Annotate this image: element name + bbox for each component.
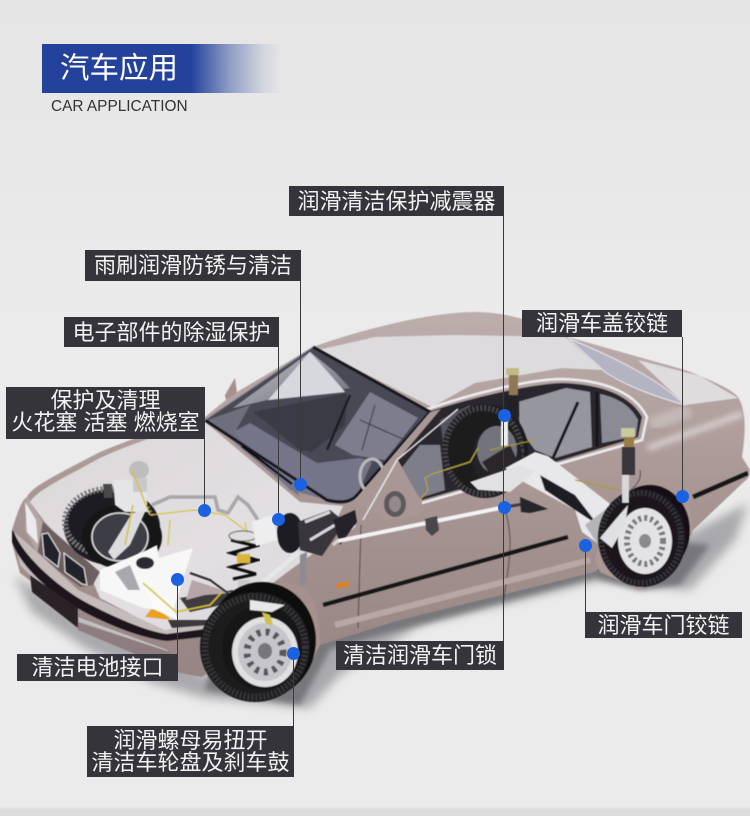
brake lines	[150, 497, 258, 550]
label: spark plug, piston, combustion chamber: 保护及清理	[50, 388, 160, 413]
lower bumper	[78, 622, 180, 673]
bumper strip	[12, 530, 212, 641]
sill highlight	[335, 560, 590, 625]
label: wheel nut and brake drum: 清洁车轮盘及刹车鼓	[91, 750, 290, 775]
leader line: wheel nut	[293, 653, 294, 726]
leader line: battery	[177, 579, 178, 654]
bumper top	[12, 530, 212, 641]
leader line: spark plug	[204, 439, 205, 510]
marker dot: door lock	[498, 501, 511, 514]
label: electronics: 电子部件的除湿保护	[72, 320, 270, 345]
label: battery: 清洁电池接口	[31, 655, 164, 680]
side windows	[397, 383, 642, 500]
side trim	[323, 537, 568, 605]
marker dot: wheel nut	[287, 647, 300, 660]
coil spring	[229, 531, 257, 615]
trunk highlight	[638, 360, 738, 405]
side body highlight	[648, 414, 742, 448]
nose panel around grille	[38, 522, 100, 587]
leader line: bonnet hinge	[682, 337, 683, 497]
roof panel	[318, 335, 602, 407]
wiper	[242, 446, 292, 484]
window belts	[553, 392, 597, 458]
hood panel	[30, 422, 343, 632]
label: shock absorber: 润滑清洁保护减震器	[297, 189, 496, 214]
label: wheel nut and brake drum: 润滑螺母易扭开	[113, 728, 268, 753]
title banner	[42, 44, 282, 93]
window frame	[397, 379, 647, 503]
marker dot: bonnet hinge	[676, 490, 689, 503]
A pillar and mirror	[355, 409, 458, 520]
rear right shock absorber	[621, 428, 635, 503]
leader line: door hinge	[585, 545, 586, 612]
seat belt and pillar	[327, 395, 350, 450]
ground shadow	[14, 503, 748, 708]
leader line: shock absorber and door lock	[503, 216, 504, 641]
marker dot: door hinge	[579, 539, 592, 552]
rear window	[568, 338, 685, 405]
marker dot: wiper	[294, 478, 307, 491]
door panel	[253, 393, 347, 452]
steering wheel	[360, 459, 384, 493]
front suspension	[100, 461, 235, 628]
steering rod	[338, 503, 530, 541]
leader line: electronics	[278, 347, 279, 520]
upper glass reflection	[233, 352, 350, 408]
label: bonnet hinge: 润滑车盖铰链	[536, 311, 668, 336]
fender lip	[205, 583, 320, 675]
label: wiper: 雨刷润滑防锈与清洁	[94, 253, 292, 278]
label: door hinge: 润滑车门铰链	[597, 613, 730, 638]
rear fender lip	[595, 487, 692, 590]
label: wheel nut and brake drum	[87, 726, 294, 777]
seat back	[335, 392, 418, 460]
mirror stalk	[225, 378, 237, 400]
rear shock absorber	[501, 368, 519, 446]
front corner	[25, 497, 42, 552]
windshield	[205, 347, 430, 502]
title banner: 汽车应用	[60, 52, 178, 85]
leader line: wiper	[300, 281, 301, 484]
front left wheel	[64, 489, 162, 569]
marker dot: electronics	[272, 513, 285, 526]
subtitle: CAR APPLICATION	[51, 98, 188, 115]
rear left wheel	[420, 404, 528, 500]
marker dot: spark plug	[198, 504, 211, 517]
windshield frame	[205, 347, 430, 502]
brake booster	[252, 510, 357, 585]
marker dot: shock absorber	[498, 409, 511, 422]
grille	[42, 533, 87, 585]
rear right wheel	[595, 485, 692, 590]
marker dot: battery	[171, 573, 184, 586]
orange indicators	[145, 604, 171, 620]
door lines	[358, 470, 640, 628]
car body	[12, 312, 750, 677]
dash	[208, 405, 300, 497]
rear subframe	[470, 440, 625, 548]
label: spark plug, piston, combustion chamber: 火花塞 活塞 燃烧室	[11, 410, 200, 435]
headlight	[25, 502, 38, 544]
label: door lock: 清洁润滑车门锁	[343, 643, 497, 668]
front right wheel	[200, 582, 320, 702]
label: spark plug, piston, combustion chamber	[6, 387, 205, 439]
